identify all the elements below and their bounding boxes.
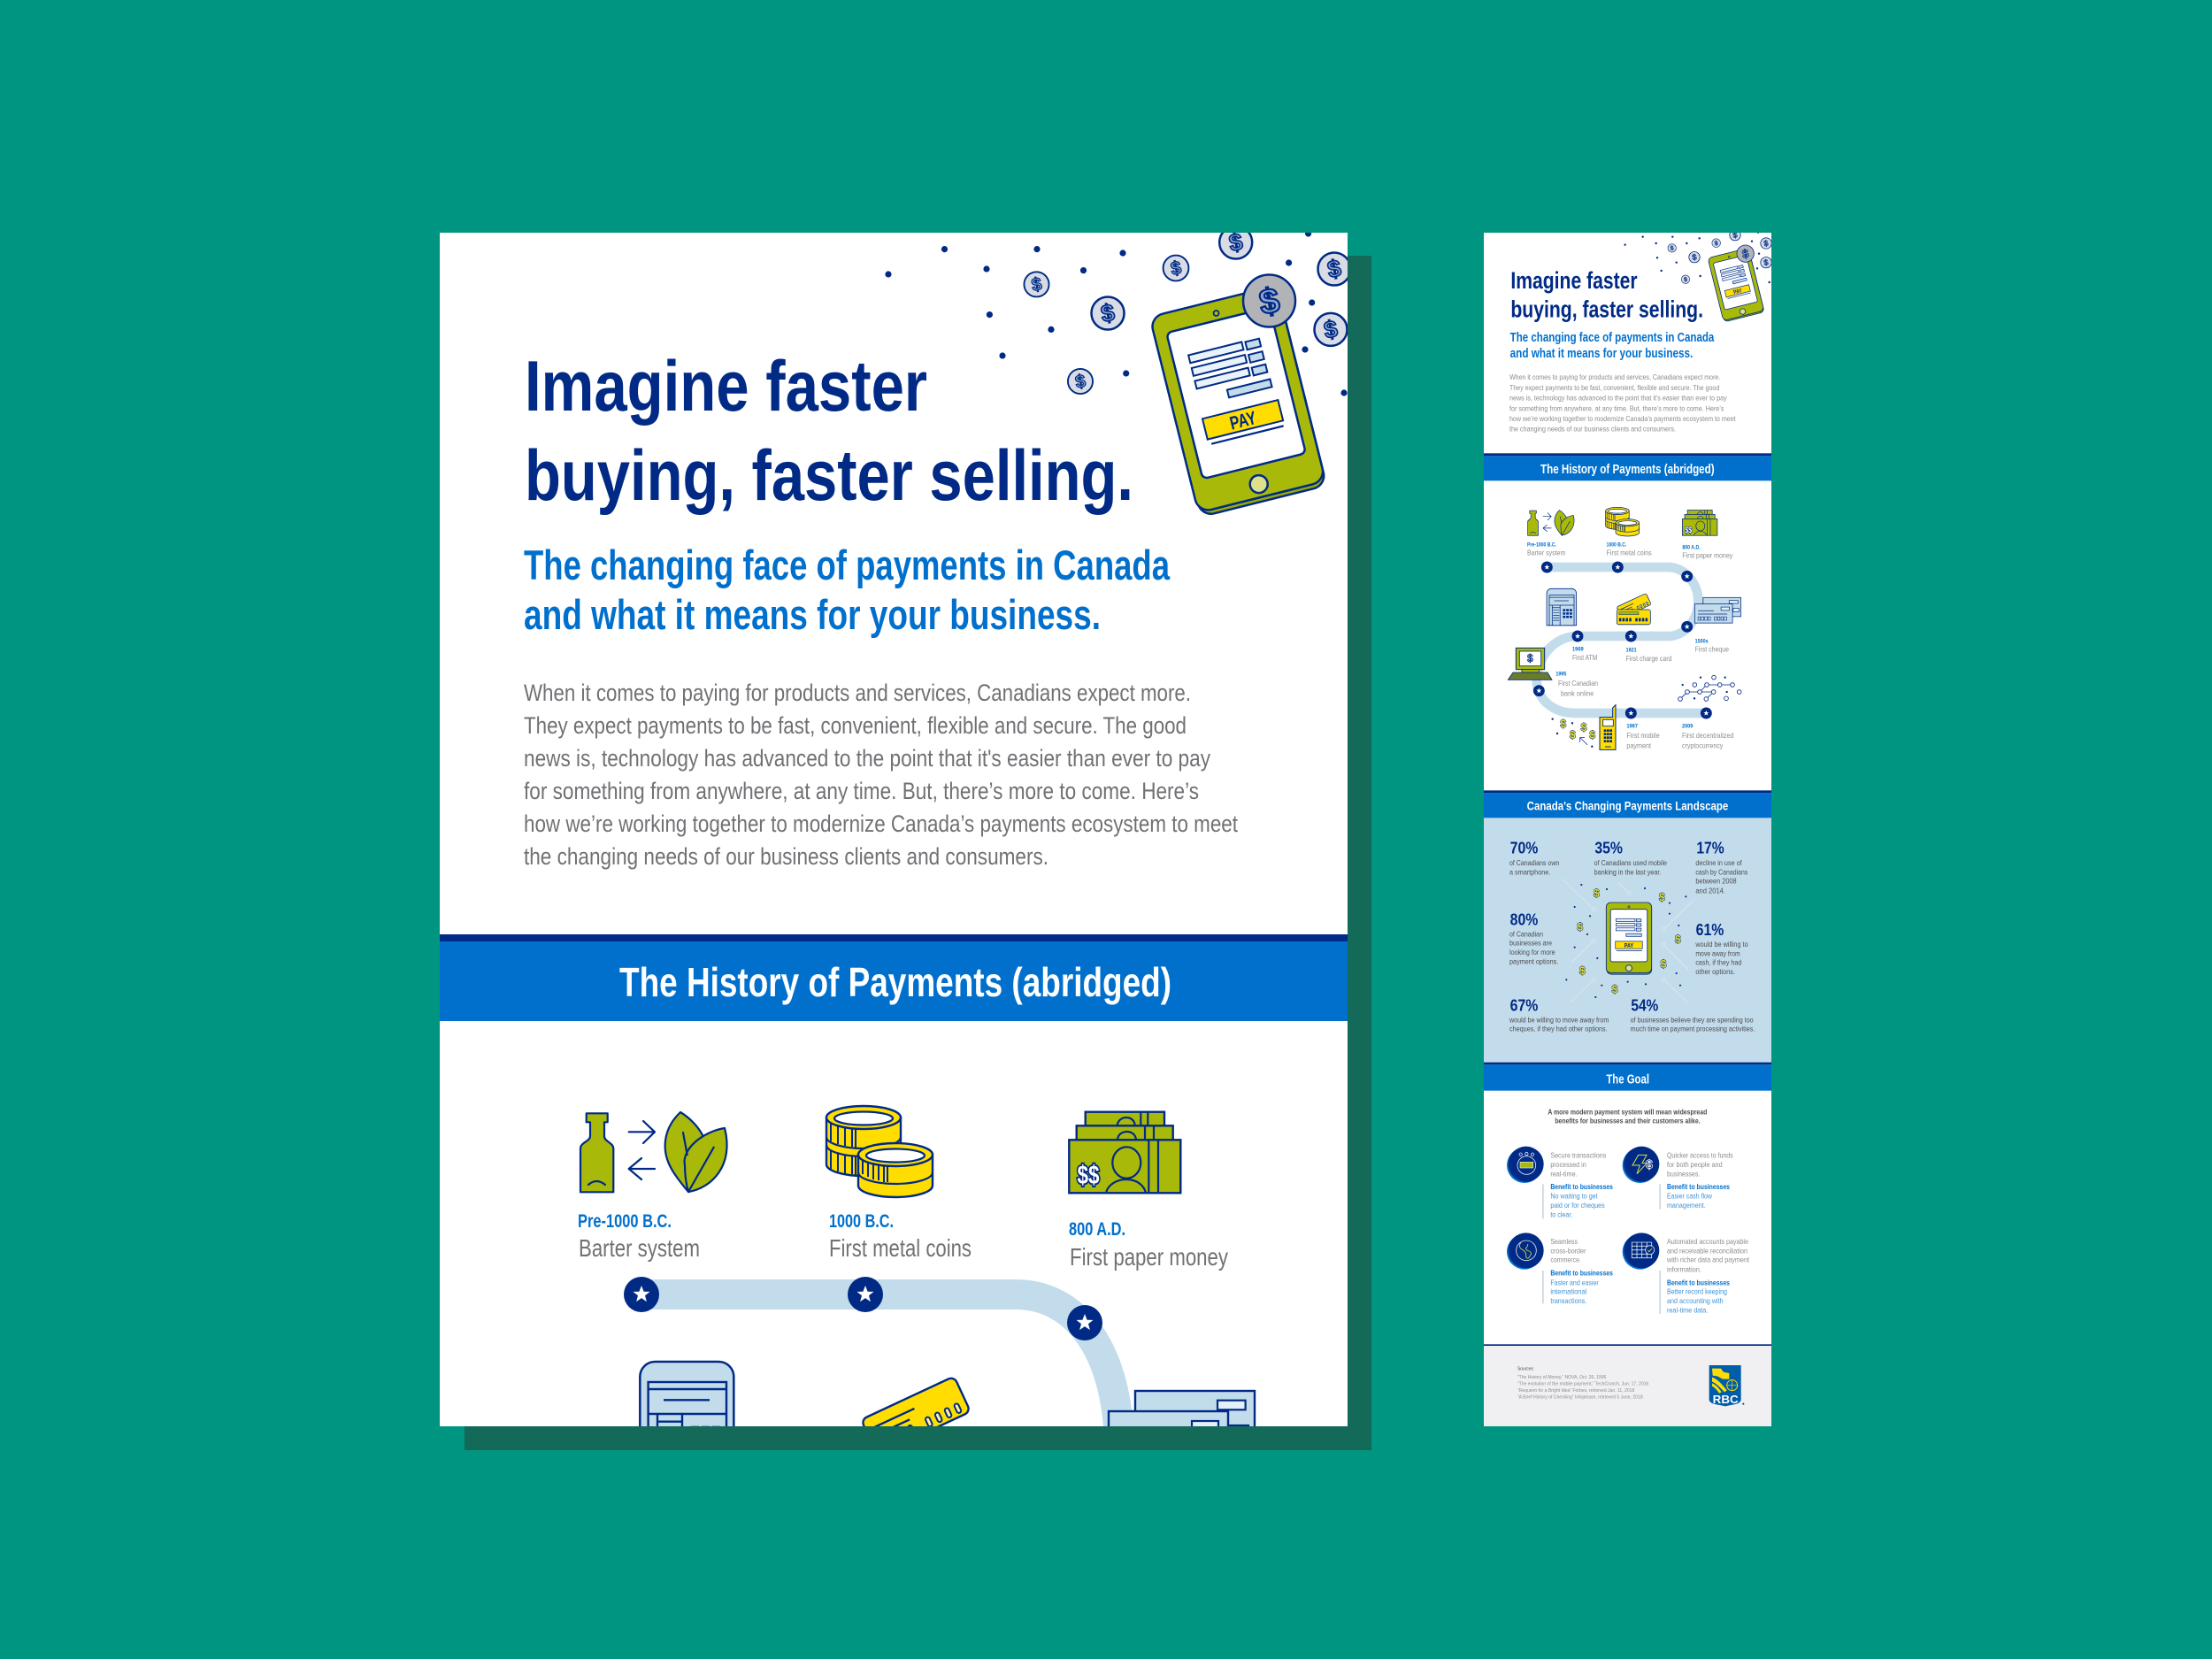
header section <box>1484 229 1771 480</box>
scattered dollars and dots: $ <box>1659 891 1665 903</box>
benefit: automated reconciliation: and receivable reconciliation <box>1667 1246 1747 1255</box>
benefit: cross-border commerce: transactions. <box>1550 1296 1586 1305</box>
benefit: automated reconciliation: Automated accounts payable <box>1667 1237 1748 1246</box>
icon: barter <box>580 1112 727 1192</box>
section: the goal <box>1484 1063 1771 1314</box>
title: buying, faster selling. <box>1510 296 1703 322</box>
subtitle: The changing face of payments in Canada <box>524 541 1171 588</box>
icon: metal coins <box>1606 507 1640 536</box>
timeline labels: 800 A.D. <box>1682 544 1701 550</box>
stat: 80%: businesses are <box>1509 940 1552 948</box>
timeline labels <box>1527 541 1733 749</box>
landscape panel background <box>1484 818 1771 1064</box>
timeline labels: First Canadian <box>1558 679 1598 687</box>
stat: 17%: and 2014. <box>1695 887 1725 895</box>
stat: 80%: payment options. <box>1509 957 1558 965</box>
timeline labels: First ATM <box>1572 653 1597 662</box>
icon: cheques <box>1694 597 1741 623</box>
benefit: automated reconciliation: information. <box>1667 1264 1701 1273</box>
icon: paper money <box>1069 1112 1180 1193</box>
icon: metal coins <box>826 1106 933 1197</box>
icon: paper money <box>1682 511 1717 535</box>
sources <box>1517 1367 1648 1400</box>
icon: grid and check <box>1623 1233 1659 1270</box>
icon: mobile phone with dollars: $ <box>1570 729 1576 741</box>
benefit: cross-border commerce <box>1507 1233 1613 1305</box>
stat: 54%: of businesses believe they are spending too <box>1631 1016 1754 1024</box>
icon: laptop: $ <box>1527 652 1533 664</box>
sources: “A Brief History of Checking” Infoplease, retrieved 5 June, 2018 <box>1517 1394 1643 1400</box>
scattered dollars and dots: $ <box>1661 957 1667 970</box>
stat: 35%: of Canadians used mobile <box>1594 859 1667 867</box>
section: payments landscape <box>1484 790 1771 1064</box>
icon: laptop <box>1508 648 1552 680</box>
timeline labels: First paper money <box>1682 551 1733 560</box>
label: first metal coins <box>830 1214 972 1256</box>
benefit: quicker access to funds: Quicker access to funds <box>1667 1151 1733 1160</box>
timeline labels: 1969 <box>1572 647 1584 653</box>
scattered dollars and dots <box>1565 884 1686 998</box>
stat: 61%: 61% <box>1696 920 1724 939</box>
icon: RBC logo: RBC <box>1713 1394 1739 1406</box>
benefit: quicker access to funds: businesses. <box>1667 1169 1700 1178</box>
intro paragraph: news is, technology has advanced to the point that it's easier than ever to pay <box>524 745 1210 772</box>
icon: mobile phone with dollars: $ <box>1581 721 1587 733</box>
benefit: automated reconciliation: with richer data and payment <box>1666 1256 1750 1264</box>
benefit: cross-border commerce: commerce. <box>1550 1256 1581 1264</box>
intro paragraph: for something from anywhere, at any time. But, there’s more to come. Here’s <box>524 778 1199 804</box>
page canvas <box>440 233 1771 1450</box>
benefit: cross-border commerce: international <box>1550 1287 1586 1296</box>
icon: cryptocurrency network <box>1678 675 1741 701</box>
title: Imagine faster <box>525 347 927 426</box>
timeline labels: First mobile <box>1626 731 1660 740</box>
panel: full infographic thumbnail <box>1484 229 1771 1426</box>
intro paragraph: for something from anywhere, at any time. But, there’s more to come. Here’s <box>1509 403 1724 412</box>
label: barter system: Barter system <box>579 1234 700 1262</box>
stat: 70%: of Canadians own <box>1509 859 1559 867</box>
benefit: quicker access to funds: Benefit to businesses <box>1667 1182 1730 1191</box>
title: buying, faster selling. <box>525 436 1133 516</box>
benefit: automated reconciliation: real-time data. <box>1667 1305 1708 1314</box>
timeline labels: 1921 <box>1626 648 1637 654</box>
icon: ATM <box>1547 588 1577 626</box>
icon: tablet <box>1708 248 1764 322</box>
stat: 67%: would be willing to move away from <box>1509 1016 1609 1024</box>
stat: 17%: decline in use of <box>1695 859 1742 867</box>
benefit: quicker access to funds: management. <box>1667 1201 1706 1210</box>
stat: 61% <box>1694 920 1748 976</box>
stat: 70% <box>1509 839 1559 876</box>
icon: tablet with pay button <box>1149 286 1326 517</box>
stat: 35%: banking in the last year. <box>1594 868 1661 876</box>
benefit: secure real-time: paid or for cheques <box>1550 1201 1605 1210</box>
panel: enlarged detail of infographic <box>440 227 1350 1478</box>
scattered dollars and dots: $ <box>1577 921 1583 933</box>
stat: 80% <box>1509 910 1558 965</box>
icon: central tablet <box>1606 902 1652 974</box>
section: history timeline <box>1508 507 1741 749</box>
sources: “The History of Money,” NOVA, Oct. 26, 1996 <box>1517 1375 1606 1380</box>
benefit: secure real-time: processed in <box>1550 1160 1586 1169</box>
timeline labels: 1000 B.C. <box>1607 541 1627 548</box>
section band: history <box>1484 453 1771 480</box>
timeline labels: 2009 <box>1682 724 1694 730</box>
intro paragraph: They expect payments to be fast, convenient, flexible and secure. The good <box>1509 383 1720 392</box>
benefit: secure real-time: real-time. <box>1550 1169 1578 1178</box>
benefit: automated reconciliation: and accounting with <box>1667 1296 1724 1305</box>
stat: 17% <box>1695 839 1747 895</box>
icon: ATM <box>639 1361 735 1426</box>
timeline labels: First metal coins <box>1607 549 1652 557</box>
timeline labels: payment <box>1626 741 1651 749</box>
icon: charge cards <box>1617 594 1651 625</box>
stat: 67% <box>1509 995 1609 1033</box>
timeline labels: Barter system <box>1527 549 1565 557</box>
section band: the goal: The Goal <box>1606 1072 1649 1087</box>
stat: 80%: of Canadian <box>1509 930 1543 938</box>
stat: 61%: cash, if they had <box>1695 959 1741 967</box>
timeline markers <box>1533 562 1712 718</box>
intro paragraph: When it comes to paying for products and services, Canadians expect more. <box>1509 373 1720 381</box>
stat: 67%: 67% <box>1510 995 1539 1014</box>
icon: barter <box>1528 511 1574 535</box>
icon: globe <box>1507 1233 1544 1270</box>
timeline labels: First charge card <box>1626 654 1671 663</box>
radiating lines <box>1563 879 1694 1003</box>
title: Imagine faster <box>1510 267 1638 294</box>
timeline labels: bank online <box>1561 689 1594 698</box>
section band: the goal <box>1484 1063 1771 1091</box>
sources: “The evolution of the mobile payment,” TechCrunch, Jun. 17, 2016 <box>1517 1381 1648 1386</box>
section: footer <box>1484 1344 1771 1426</box>
benefit: cross-border commerce: Benefit to businesses <box>1550 1269 1613 1278</box>
benefit: cross-border commerce: Faster and easier <box>1550 1278 1599 1286</box>
sources: Sources <box>1517 1367 1533 1372</box>
sources: “Requiem for a Bright Idea” Forbes, retrieved Jan. 11, 2018 <box>1517 1388 1634 1394</box>
stat: 54%: 54% <box>1631 995 1659 1014</box>
timeline labels: 1995 <box>1555 672 1567 678</box>
goal introduction: benefits for businesses and their customers alike. <box>1555 1117 1701 1125</box>
timeline track <box>1537 567 1706 713</box>
icon: mobile phone with dollars <box>1551 705 1616 749</box>
scattered dollars and dots: $ <box>1612 983 1618 995</box>
benefit: quicker access to funds: for both people and <box>1667 1160 1723 1169</box>
timeline labels: 1997 <box>1626 724 1638 730</box>
benefit: automated reconciliation: Benefit to businesses <box>1667 1278 1730 1286</box>
icon: grey dollar coin <box>1737 245 1754 262</box>
label: first metal coins: First metal coins <box>829 1234 972 1262</box>
stat: 17%: between 2008 <box>1695 878 1737 886</box>
icon: grey dollar coin: $ <box>1741 247 1750 261</box>
section band: landscape: Canada's Changing Payments Landscape <box>1527 798 1729 812</box>
icon: cheques <box>1108 1389 1256 1426</box>
timeline markers <box>624 1277 1102 1340</box>
stat: 61%: move away from <box>1695 949 1740 957</box>
icon: large grey dollar coin <box>1243 274 1295 327</box>
intro paragraph: news is, technology has advanced to the point that it's easier than ever to pay <box>1509 394 1727 403</box>
benefit: secure real-time: Secure transactions <box>1550 1151 1606 1160</box>
benefit: automated reconciliation <box>1623 1233 1750 1314</box>
benefit: secure real-time: Benefit to businesses <box>1550 1182 1613 1191</box>
section band: landscape <box>1484 790 1771 818</box>
intro paragraph: They expect payments to be fast, convenient, flexible and secure. The good <box>524 712 1187 739</box>
timeline labels: Pre-1000 B.C. <box>1527 541 1556 548</box>
section band: history <box>440 934 1348 1021</box>
goal introduction: A more modern payment system will mean widespread <box>1548 1108 1707 1116</box>
label: first paper money: First paper money <box>1070 1243 1228 1271</box>
scattered dollars and dots: $ <box>1579 964 1586 977</box>
intro paragraph: how we’re working together to modernize Canada’s payments ecosystem to meet <box>524 810 1238 837</box>
label: first metal coins: 1000 B.C. <box>829 1211 894 1232</box>
benefit: secure real-time: No waiting to get <box>1550 1192 1598 1201</box>
section band: history: The History of Payments (abridged) <box>1540 463 1715 477</box>
label: first paper money <box>1069 1219 1228 1271</box>
footer rule <box>1484 1344 1771 1346</box>
benefit: automated reconciliation: Better record keeping <box>1667 1287 1727 1296</box>
benefit: cross-border commerce: Seamless <box>1550 1237 1578 1246</box>
timeline labels: First cheque <box>1695 645 1729 654</box>
intro paragraph: When it comes to paying for products and services, Canadians expect more. <box>524 680 1191 706</box>
stat: 61%: other options. <box>1695 968 1735 976</box>
subtitle: The changing face of payments in Canada <box>1510 331 1715 345</box>
stat: 67%: cheques, if they had other options. <box>1509 1025 1608 1033</box>
timeline track <box>641 1294 1119 1451</box>
stat: 17%: 17% <box>1696 839 1724 857</box>
icon: stopwatch <box>1507 1147 1544 1183</box>
timeline labels: cryptocurrency <box>1682 741 1724 749</box>
intro paragraph: the changing needs of our business clients and consumers. <box>524 843 1048 870</box>
large panel drop shadow <box>465 256 1371 1450</box>
stat: 35%: 35% <box>1594 839 1623 857</box>
benefit: quicker access to funds <box>1623 1147 1733 1210</box>
benefit: secure real-time <box>1507 1147 1613 1218</box>
subtitle: and what it means for your business. <box>524 591 1101 638</box>
label: first paper money: 800 A.D. <box>1069 1219 1125 1240</box>
icon: RBC logo <box>1709 1365 1744 1406</box>
scattered dollars and dots: $ <box>1675 933 1681 945</box>
stat: 54% <box>1631 995 1755 1033</box>
icon: mobile phone with dollars: $ <box>1589 729 1595 741</box>
stat: 70%: 70% <box>1510 839 1539 857</box>
stat: 80%: 80% <box>1510 910 1539 928</box>
stat: 54%: much time on payment processing activities. <box>1631 1025 1755 1033</box>
scattered dollars and dots: $ <box>1594 887 1600 900</box>
icon: charge cards <box>862 1377 970 1426</box>
stat: 35% <box>1594 839 1667 876</box>
stat: 17%: cash by Canadians <box>1695 868 1747 876</box>
label: barter system: Pre-1000 B.C. <box>578 1211 672 1232</box>
label: barter system <box>578 1211 700 1262</box>
icon: large grey dollar coin: $ <box>1256 280 1282 323</box>
benefit: cross-border commerce: cross-border <box>1550 1246 1586 1255</box>
timeline labels: 1500s <box>1695 638 1709 644</box>
icon: scattered coins and dots <box>885 227 1350 396</box>
icon: lightning and dollar: $ <box>1646 1157 1653 1171</box>
stat: 80%: looking for more <box>1509 949 1555 956</box>
section band: history: The History of Payments (abridged) <box>619 959 1171 1005</box>
icon: scattered coins and dots <box>1624 229 1771 283</box>
stat: 70%: a smartphone. <box>1509 868 1550 876</box>
footer background <box>1484 1344 1771 1426</box>
benefit: quicker access to funds: Easier cash flow <box>1667 1192 1713 1201</box>
intro paragraph: the changing needs of our business clients and consumers. <box>1509 425 1676 434</box>
stat: 61%: would be willing to <box>1694 941 1748 949</box>
timeline labels: First decentralized <box>1682 731 1733 740</box>
intro paragraph: how we’re working together to modernize Canada’s payments ecosystem to meet <box>1509 414 1736 423</box>
subtitle: and what it means for your business. <box>1510 347 1693 361</box>
icon: mobile phone with dollars: $ <box>1560 718 1566 730</box>
benefit: secure real-time: to clear. <box>1550 1210 1572 1218</box>
